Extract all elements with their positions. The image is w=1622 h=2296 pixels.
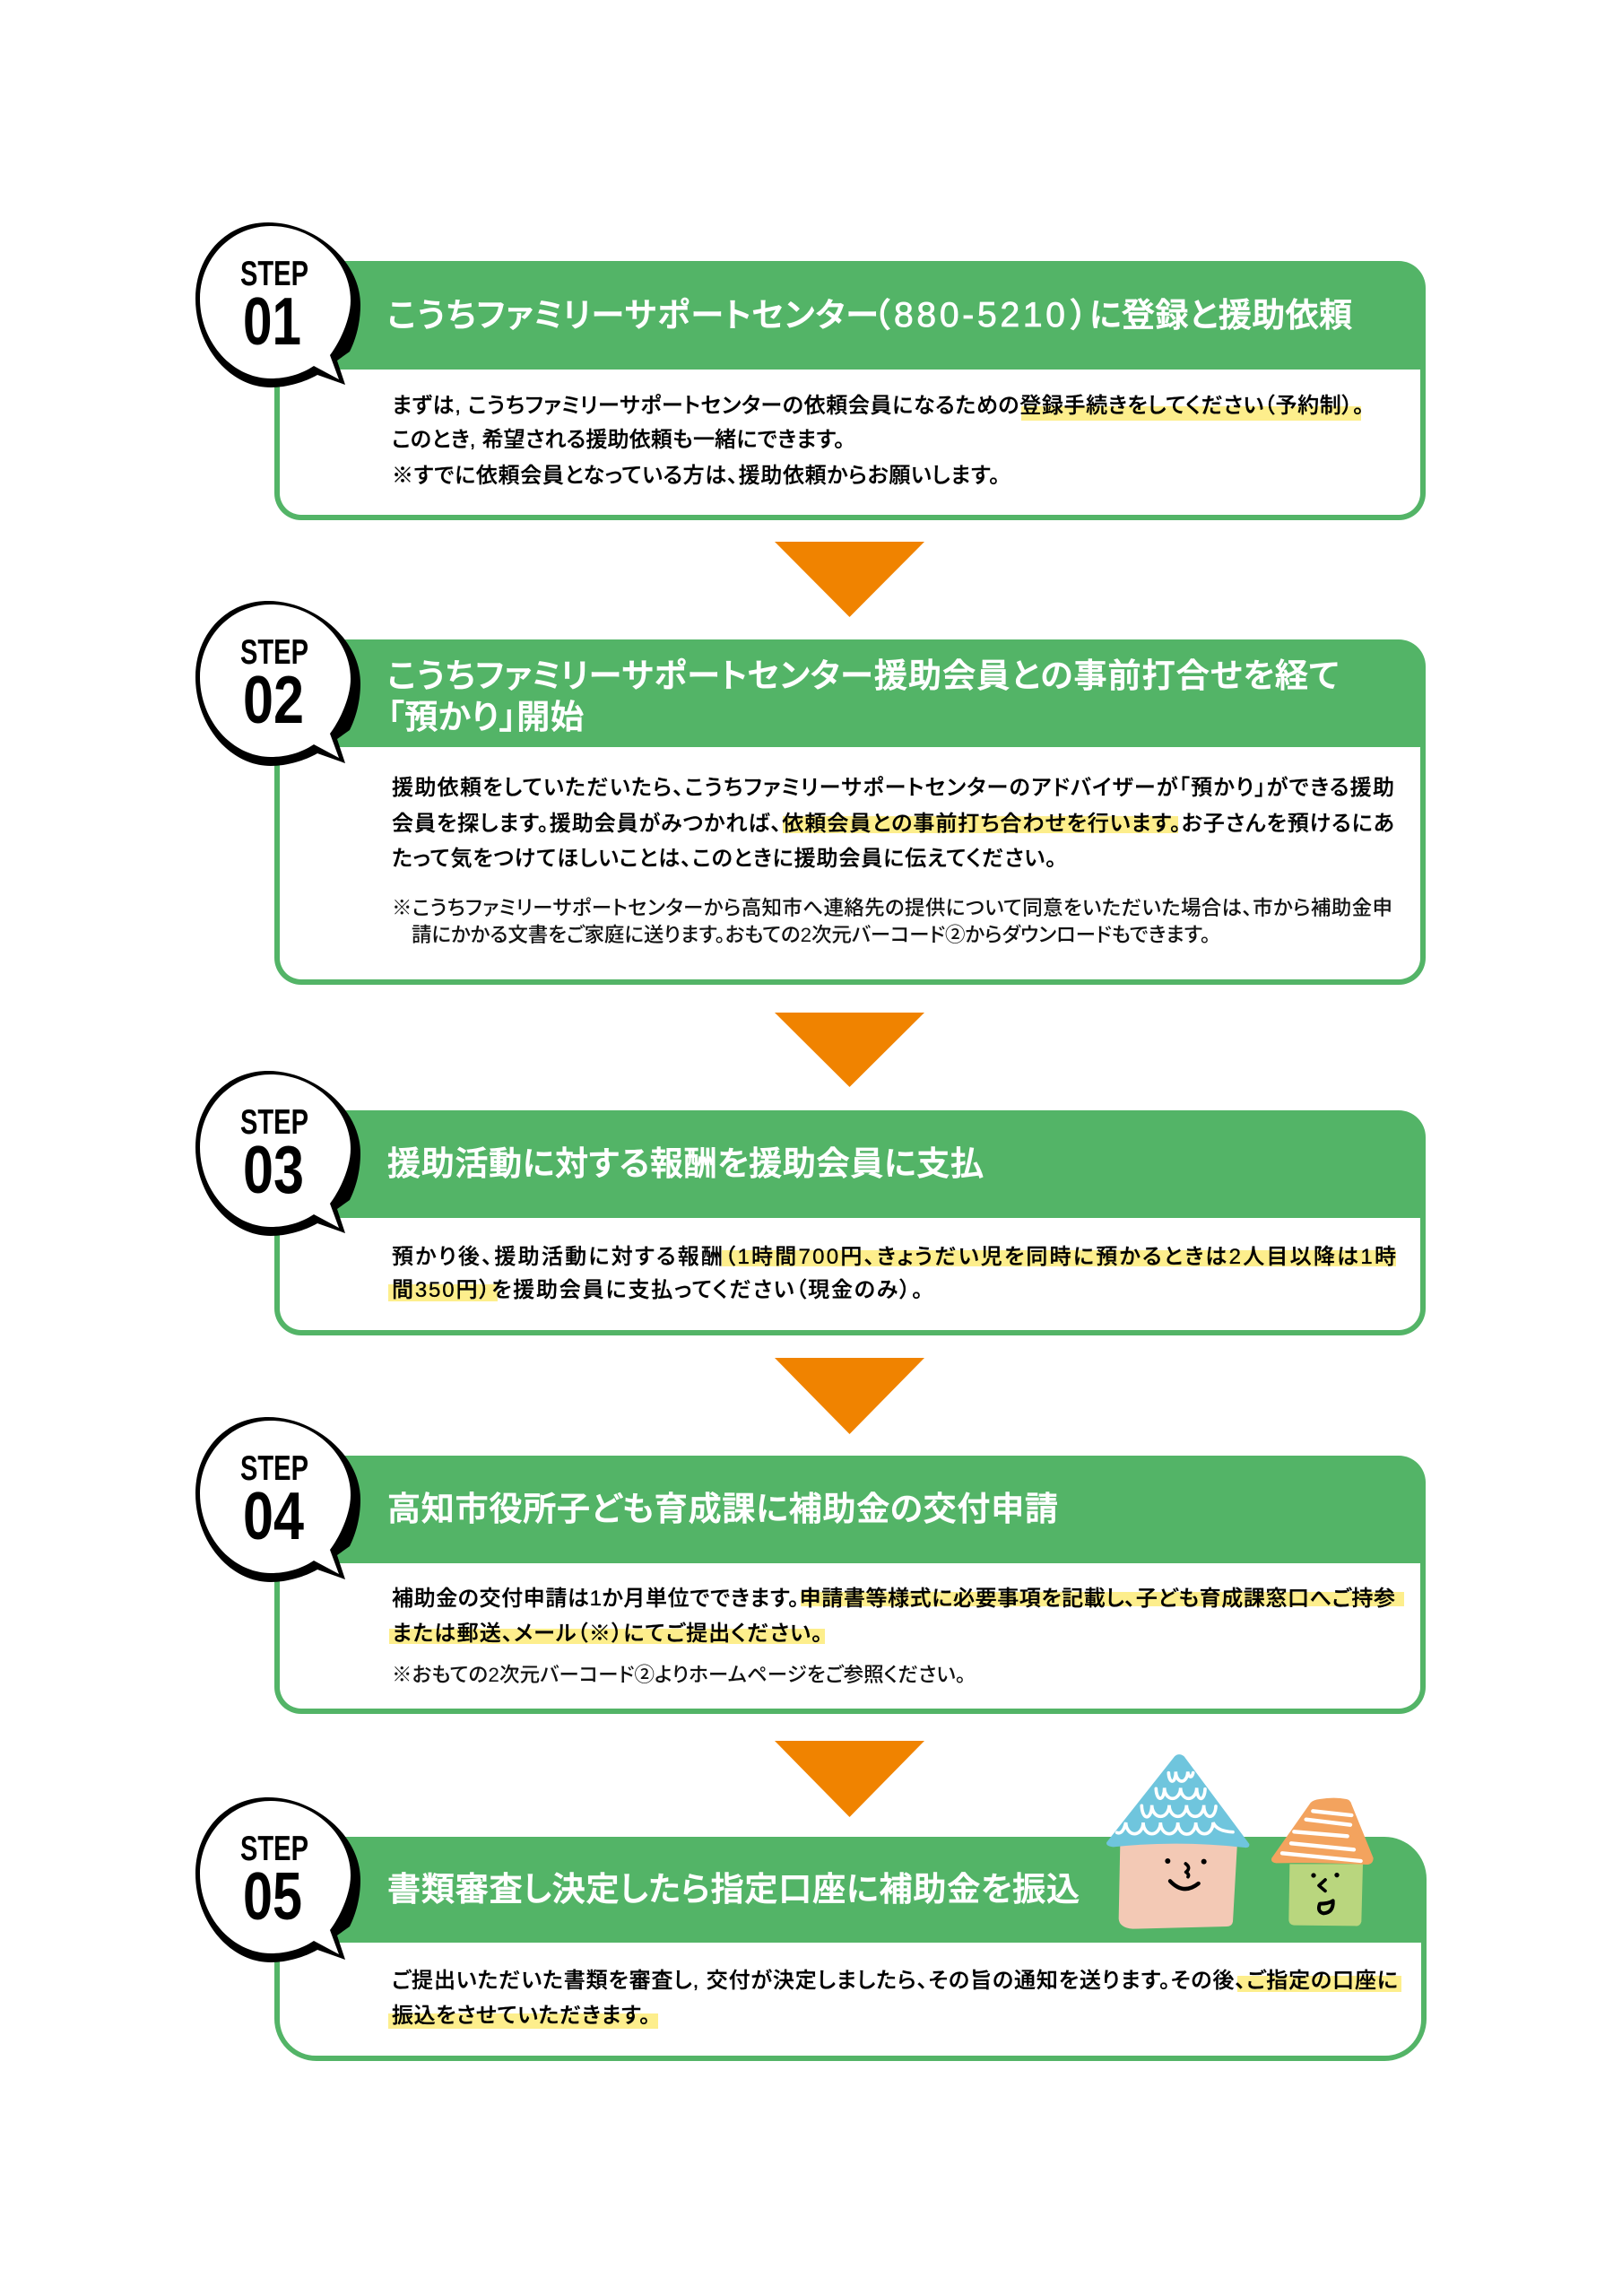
icon: STEP 02 speech bubble: STEP bbox=[240, 633, 308, 672]
text block: step 1 body: まずは, こうちファミリーサポートセンターの依頼会員になるための登録手続きをしてください（予約制）。 bbox=[392, 394, 1364, 418]
icon: STEP 01 speech bubble: STEP bbox=[240, 255, 308, 293]
icon: STEP 02 speech bubble: 02 bbox=[243, 662, 304, 737]
text block: step 2 note: 請にかかる文書をご家庭に送ります。おもての2次元バーコード②からダウンロードもできます。 bbox=[412, 924, 1210, 946]
icon: STEP 02 speech bubble bbox=[195, 601, 360, 766]
heading: step 2: 「預かり」開始 bbox=[387, 699, 584, 735]
text block: step 1 body: このとき, 希望される援助依頼も一緒にできます。 bbox=[392, 428, 845, 452]
heading: step 1: ） bbox=[1071, 297, 1087, 334]
panel: step 4 bbox=[195, 1417, 1426, 1714]
card: step 2 frame bbox=[274, 639, 1426, 985]
heading: step 1: 880-5210 bbox=[894, 296, 1065, 335]
text block: step 5 body: ご提出いただいた書類を審査し, 交付が決定しましたら、その旨の通知を送ります。その後、ご指定の口座に bbox=[392, 1969, 1398, 1993]
panel: step 3 bbox=[195, 1071, 1426, 1335]
icon: STEP 01 speech bubble: 01 bbox=[243, 283, 301, 359]
text block: step 1 body: ※すでに依頼会員となっている方は、援助依頼からお願いします。 bbox=[392, 464, 1000, 488]
icon: green house with orange striped roof bbox=[1271, 1798, 1374, 1926]
arrow: step 2 to 3 bbox=[775, 1013, 924, 1087]
icon: STEP 03 speech bubble bbox=[195, 1071, 360, 1236]
panel: step 1 bbox=[195, 222, 1426, 520]
arrow: step 1 to 2 bbox=[775, 542, 924, 617]
heading: step 4: 高知市役所子ども育成課に補助金の交付申請 bbox=[387, 1491, 1058, 1527]
card: step 3 frame bbox=[274, 1110, 1426, 1335]
arrow: step 4 to 5 bbox=[775, 1741, 924, 1817]
card: step 4 frame bbox=[274, 1456, 1426, 1714]
icon: STEP 03 speech bubble: 03 bbox=[243, 1132, 304, 1207]
text block: step 4 body: または郵送、メール（※）にてご提出ください。 bbox=[392, 1622, 822, 1646]
heading: step 1 bbox=[387, 296, 1352, 335]
heading: step 5: 書類審査し決定したら指定口座に補助金を振込 bbox=[387, 1871, 1080, 1908]
text block: step 1 body bbox=[392, 394, 1364, 488]
text block: step 2 note bbox=[392, 897, 1392, 946]
icon: STEP 01 speech bubble bbox=[195, 222, 360, 387]
text block: step 3 body bbox=[388, 1245, 1396, 1302]
card: step 5 frame bbox=[274, 1837, 1427, 2061]
icon: STEP 05 speech bubble: 05 bbox=[243, 1858, 302, 1934]
arrow: step 3 to 4 bbox=[775, 1358, 924, 1434]
text block: step 4 body: 補助金の交付申請は1か月単位でできます。申請書等様式に必要事項を記載し、子ども育成課窓口へご持参 bbox=[392, 1587, 1395, 1611]
icon: STEP 04 speech bubble: 04 bbox=[243, 1478, 304, 1553]
heading: step 3: 援助活動に対する報酬を援助会員に支払 bbox=[387, 1145, 984, 1182]
icon: pink house with blue scalloped roof bbox=[1106, 1754, 1249, 1929]
text block: step 5 body: 振込をさせていただきます。 bbox=[392, 2004, 650, 2028]
icon: STEP 05 speech bubble bbox=[195, 1797, 360, 1962]
icon: STEP 03 speech bubble: STEP bbox=[240, 1103, 308, 1142]
text block: step 2 body: たって気をつけてほしいことは、このときに援助会員に伝えてください。 bbox=[392, 847, 1056, 871]
panel: step 2 bbox=[195, 601, 1426, 985]
icon: STEP 04 speech bubble: STEP bbox=[240, 1449, 308, 1488]
text block: step 3 body: 間350円）を援助会員に支払ってください（現金のみ）。 bbox=[392, 1278, 923, 1302]
text block: step 2 body: 援助依頼をしていただいたら、こうちファミリーサポートセンターのアドバイザーが「預かり」ができる援助 bbox=[392, 776, 1394, 800]
text block: step 2 body: 会員を探します。援助会員がみつかれば、依頼会員との事前打ち合わせを行います。お子さんを預けるにあ bbox=[392, 812, 1394, 836]
icon: STEP 04 speech bubble bbox=[195, 1417, 360, 1582]
icon: STEP 05 speech bubble: STEP bbox=[240, 1830, 308, 1868]
heading: step 2 bbox=[387, 657, 1340, 735]
card: step 1 frame bbox=[274, 261, 1426, 520]
heading: step 1: （ bbox=[873, 297, 890, 334]
text block: step 2 body bbox=[392, 776, 1394, 871]
text block: step 4 body bbox=[389, 1587, 1404, 1646]
text block: step 4 note: ※おもての2次元バーコード②よりホームページをご参照ください。 bbox=[392, 1664, 966, 1686]
heading: step 1: こうちファミリーサポートセンター bbox=[387, 297, 879, 334]
panel: step 5 bbox=[195, 1754, 1427, 2061]
text block: step 3 body: 預かり後、援助活動に対する報酬（1時間700円、きょうだい児を同時に預かるときは2人目以降は1時 bbox=[392, 1245, 1396, 1269]
heading: step 1: に登録と援助依頼 bbox=[1089, 297, 1352, 334]
text block: step 5 body bbox=[388, 1969, 1401, 2029]
heading: step 2: こうちファミリーサポートセンター援助会員との事前打合せを経て bbox=[387, 657, 1340, 694]
text block: step 2 note: ※こうちファミリーサポートセンターから高知市へ連絡先の提供について同意をいただいた場合は、市から補助金申 bbox=[392, 897, 1392, 919]
